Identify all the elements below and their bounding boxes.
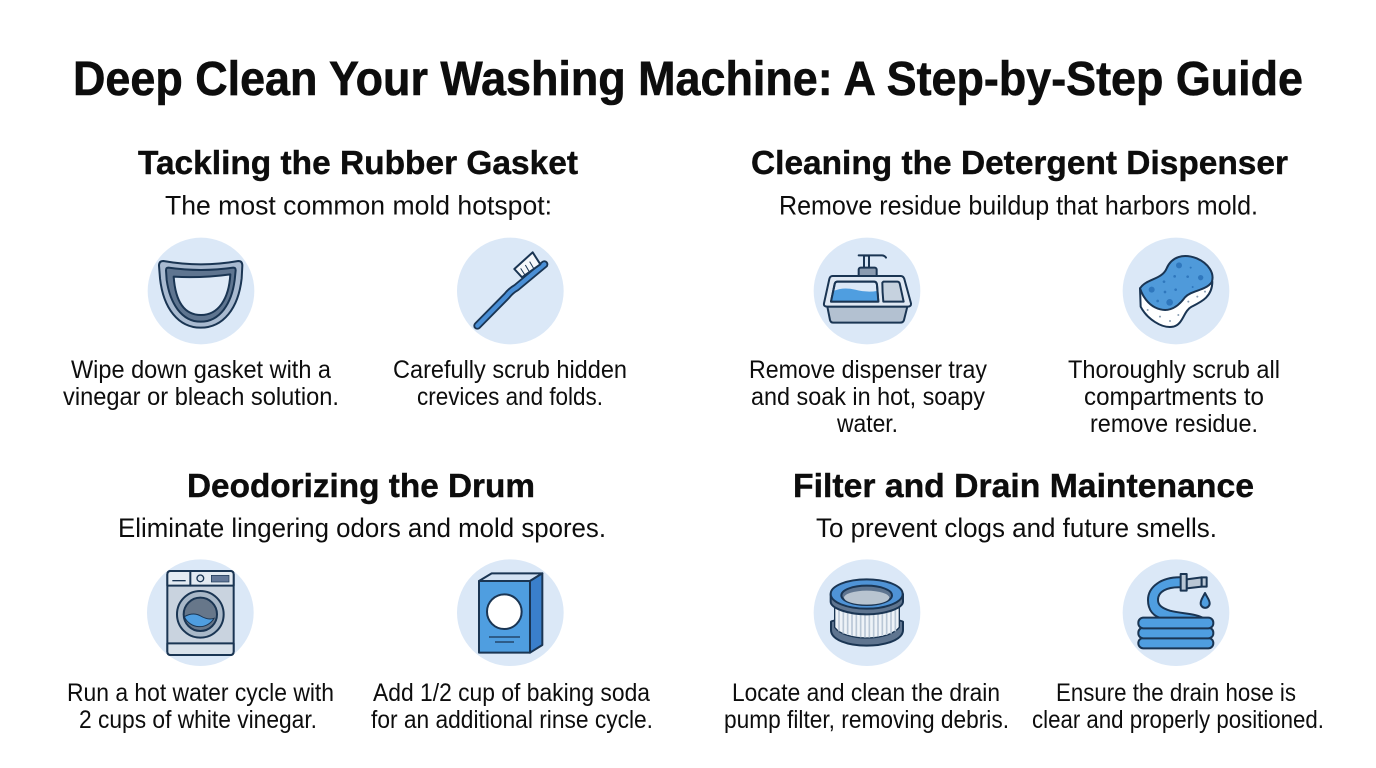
caption: drain pump filter: pump filter, removing debris. bbox=[724, 706, 1009, 734]
caption: drain pump filter bbox=[724, 679, 1009, 734]
caption: scrub compartments bbox=[1068, 356, 1280, 438]
caption: wipe gasket bbox=[63, 356, 339, 411]
panel: rubber gasket bbox=[63, 145, 627, 411]
icon: dispenser tray bbox=[814, 238, 920, 344]
caption: baking soda bbox=[371, 679, 653, 734]
caption: soak tray: water. bbox=[836, 410, 898, 438]
caption: drain hose: Ensure the drain hose is bbox=[1056, 679, 1296, 707]
icon: drain filter bbox=[814, 559, 920, 666]
icon: drain hose bbox=[1123, 559, 1229, 666]
caption: hot water cycle: Run a hot water cycle with bbox=[67, 679, 334, 707]
panel: filter and drain bbox=[724, 468, 1324, 734]
caption: hot water cycle bbox=[67, 679, 334, 734]
title: Deep Clean Your Washing Machine: A Step-by-Step Guide bbox=[73, 53, 1303, 106]
caption: drain pump filter: Locate and clean the drain bbox=[732, 679, 1000, 707]
icon: toothbrush bbox=[457, 238, 564, 344]
caption: drain hose bbox=[1032, 679, 1324, 734]
caption: scrub crevices: crevices and folds. bbox=[417, 383, 603, 411]
caption: scrub compartments: remove residue. bbox=[1090, 410, 1258, 438]
subheading: rubber gasket: The most common mold hotspot: bbox=[165, 190, 552, 220]
caption: hot water cycle: 2 cups of white vinegar. bbox=[79, 706, 317, 734]
caption: scrub crevices: Carefully scrub hidden bbox=[393, 356, 627, 384]
caption: scrub compartments: compartments to bbox=[1084, 383, 1264, 411]
panel: detergent dispenser bbox=[749, 145, 1288, 438]
heading: rubber gasket: Tackling the Rubber Gasket bbox=[138, 145, 578, 182]
icon: baking soda box bbox=[457, 559, 564, 666]
caption: wipe gasket: Wipe down gasket with a bbox=[71, 356, 331, 384]
caption: soak tray: Remove dispenser tray bbox=[749, 356, 987, 384]
icon: sponge bbox=[1123, 238, 1229, 344]
icon: gasket bbox=[148, 238, 254, 344]
icon: washing machine bbox=[147, 559, 254, 666]
subheading: detergent dispenser: Remove residue buildup that harbors mold. bbox=[779, 190, 1258, 220]
heading: detergent dispenser: Cleaning the Detergent Dispenser bbox=[751, 145, 1288, 182]
caption: scrub compartments: Thoroughly scrub all bbox=[1068, 356, 1280, 384]
caption: scrub crevices bbox=[393, 356, 627, 411]
subheading: deodorizing drum: Eliminate lingering odors and mold spores. bbox=[118, 513, 606, 543]
caption: wipe gasket: vinegar or bleach solution. bbox=[63, 383, 339, 411]
heading: filter and drain: Filter and Drain Maintenance bbox=[793, 468, 1254, 505]
panel: deodorizing drum bbox=[67, 468, 653, 734]
heading: deodorizing drum: Deodorizing the Drum bbox=[187, 468, 535, 505]
caption: drain hose: clear and properly positioned. bbox=[1032, 706, 1324, 734]
subheading: filter and drain: To prevent clogs and future smells. bbox=[816, 513, 1217, 543]
caption: baking soda: for an additional rinse cycle. bbox=[371, 706, 653, 734]
caption: baking soda: Add 1/2 cup of baking soda bbox=[373, 679, 650, 707]
caption: soak tray bbox=[749, 356, 987, 438]
caption: soak tray: and soak in hot, soapy bbox=[751, 383, 985, 411]
